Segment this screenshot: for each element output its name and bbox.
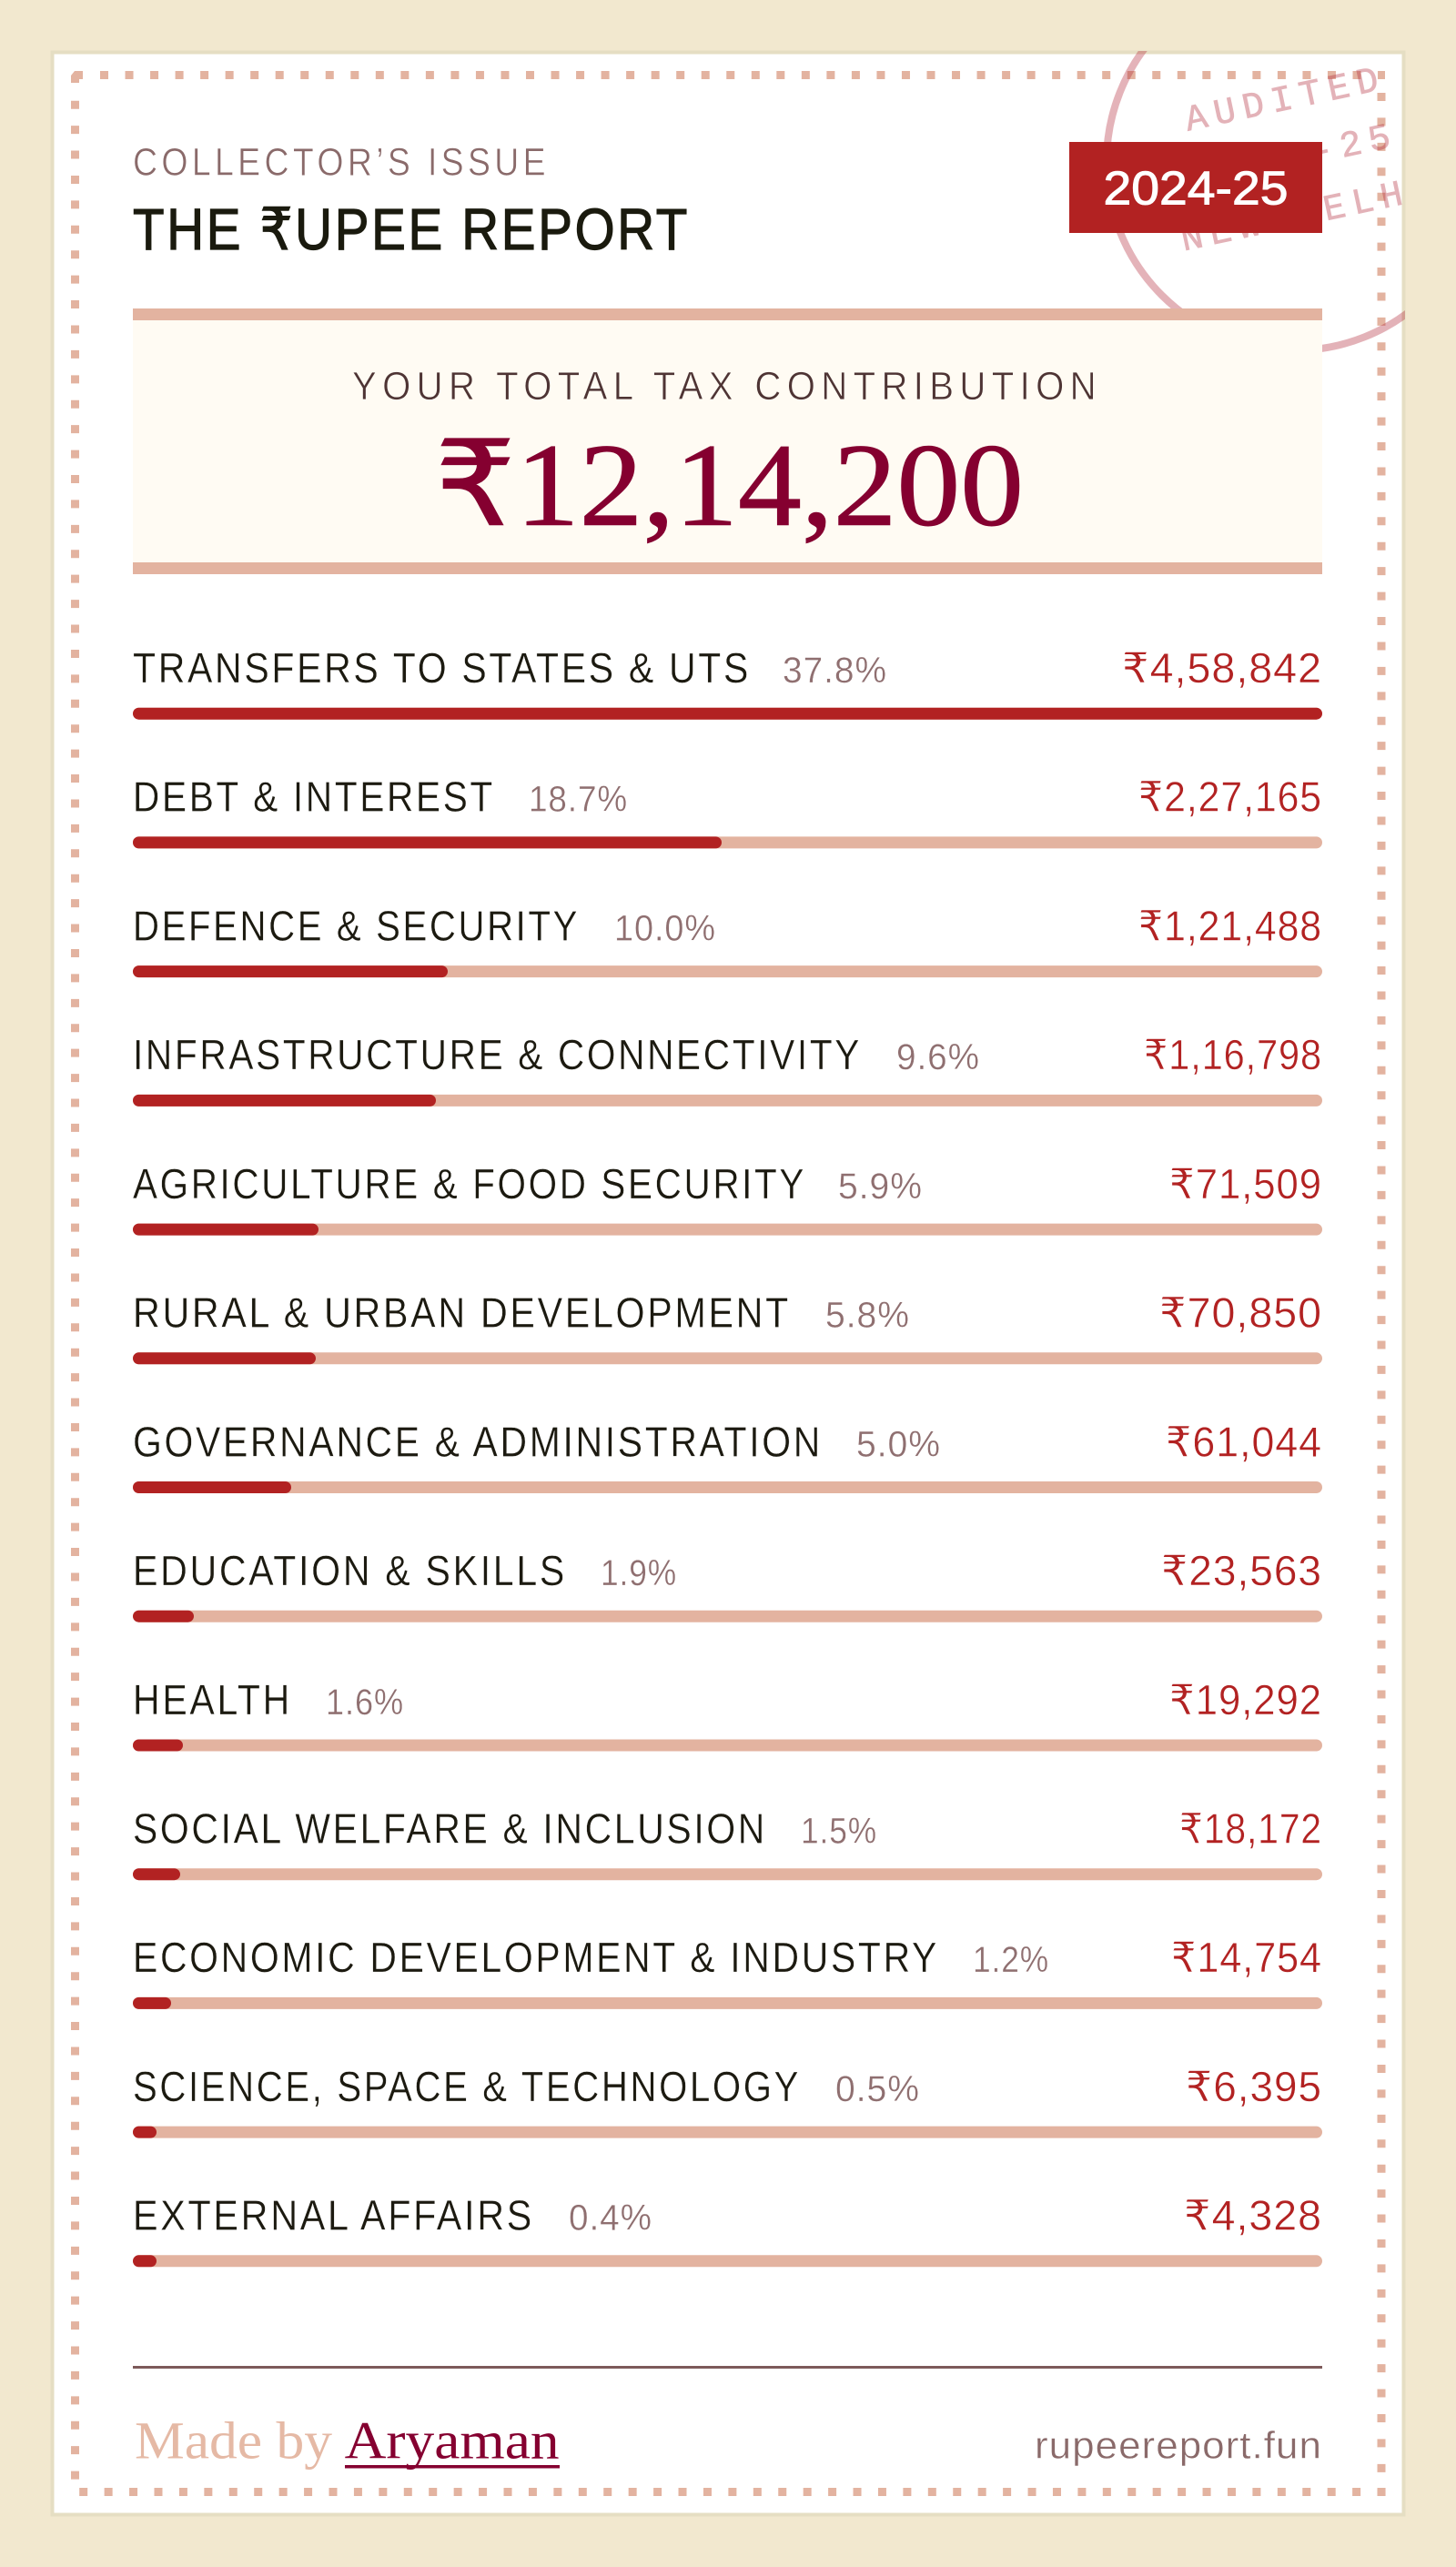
row: infrastructure and connectivity [133,1031,1322,1107]
row: transfers to states [133,644,1322,720]
label: RURAL & URBAN DEVELOPMENT [133,1289,791,1337]
title: THE ₹UPEE REPORT [133,197,690,262]
bar fill [133,1481,291,1493]
share: 0.5% [835,2069,920,2109]
bar track [133,1095,1322,1107]
icon: audited postmark stamp: NEW DELHI [1178,167,1442,262]
label: HEALTH [133,1676,292,1723]
label: INFRASTRUCTURE & CONNECTIVITY [133,1031,862,1078]
row: economic development and industry [133,1934,1322,2009]
share: 9.6% [896,1037,980,1077]
amount: ₹19,292 [1169,1676,1322,1723]
row: science, space and technology [133,2063,1322,2138]
total amount: ₹12,14,200 [435,420,1024,551]
author underline [345,2465,560,2468]
bar fill [133,965,448,977]
bar track [133,1481,1322,1493]
share: 10.0% [614,908,716,948]
share: 1.2% [973,1940,1049,1980]
bar track [133,2255,1322,2267]
share: 0.4% [569,2198,652,2239]
bar fill [133,836,722,848]
bar fill [133,2255,157,2267]
amount: ₹2,27,165 [1138,773,1322,821]
total label: YOUR TOTAL TAX CONTRIBUTION [352,364,1102,409]
footer url: rupeereport.fun [1035,2424,1322,2467]
share: 5.9% [838,1167,923,1207]
bar fill [133,1352,316,1364]
amount: ₹1,21,488 [1138,902,1322,949]
year badge [1069,142,1322,233]
bar track [133,1224,1322,1236]
label: SCIENCE, SPACE & TECHNOLOGY [133,2063,801,2110]
share: 1.9% [601,1553,677,1593]
icon: audited postmark stamp [1104,51,1405,352]
amount: ₹4,328 [1184,2192,1322,2239]
bar fill [133,1224,318,1236]
bar fill [133,1740,183,1751]
amount: ₹6,395 [1186,2063,1322,2110]
row: governance and administration [133,1418,1322,1493]
bar fill [133,1997,171,2009]
share: 5.0% [856,1424,941,1464]
row: social welfare and inclusion [133,1805,1322,1880]
row: health [133,1676,1322,1751]
label: GOVERNANCE & ADMINISTRATION [133,1418,823,1465]
bar fill [133,2127,157,2138]
footer rule [133,2366,1322,2369]
made by: Made by [135,2411,332,2471]
amount: ₹61,044 [1166,1418,1322,1465]
bar track [133,1868,1322,1880]
share: 37.8% [783,651,887,691]
author: Aryaman [345,2411,560,2471]
amount: ₹23,563 [1161,1547,1322,1594]
label: EDUCATION & SKILLS [133,1547,567,1594]
share: 1.6% [326,1683,404,1723]
amount: ₹14,754 [1171,1934,1322,1981]
bar track [133,836,1322,848]
amount: ₹18,172 [1179,1805,1322,1853]
bar track [133,708,1322,720]
bar fill [133,1611,194,1622]
amount: ₹4,58,842 [1122,644,1322,692]
row: external affairs [133,2192,1322,2267]
bar track [133,1997,1322,2009]
share: 18.7% [529,780,628,820]
bar fill [133,1868,180,1880]
icon: audited postmark stamp: AUDITED [1182,60,1390,142]
label: DEBT & INTEREST [133,773,495,821]
row: defence and security [133,902,1322,977]
amount: ₹71,509 [1169,1160,1322,1208]
row: education and skills [133,1547,1322,1622]
footer credit [135,2411,560,2471]
bar track [133,1740,1322,1751]
row: debt and interest [133,773,1322,848]
label: EXTERNAL AFFAIRS [133,2192,534,2239]
label: ECONOMIC DEVELOPMENT & INDUSTRY [133,1934,939,1981]
label: SOCIAL WELFARE & INCLUSION [133,1805,767,1853]
label: DEFENCE & SECURITY [133,902,580,949]
bar track [133,2127,1322,2138]
panel: total contribution [133,308,1322,574]
bar fill [133,708,1322,720]
share: 1.5% [801,1811,877,1851]
eyebrow: COLLECTOR’S ISSUE [133,140,550,184]
bar fill [133,1095,436,1107]
year badge: 2024-25 [1103,162,1289,215]
bar track [133,1352,1322,1364]
amount: ₹70,850 [1159,1289,1322,1337]
amount: ₹1,16,798 [1144,1031,1322,1078]
share: 5.8% [825,1296,910,1336]
bar track [133,1611,1322,1622]
row: agriculture and food security [133,1160,1322,1236]
row: rural and urban development [133,1289,1322,1364]
bar track [133,965,1322,977]
icon: audited postmark stamp: 2024-25 [1194,116,1401,199]
label: TRANSFERS TO STATES & UTS [133,644,751,692]
label: AGRICULTURE & FOOD SECURITY [133,1160,806,1208]
